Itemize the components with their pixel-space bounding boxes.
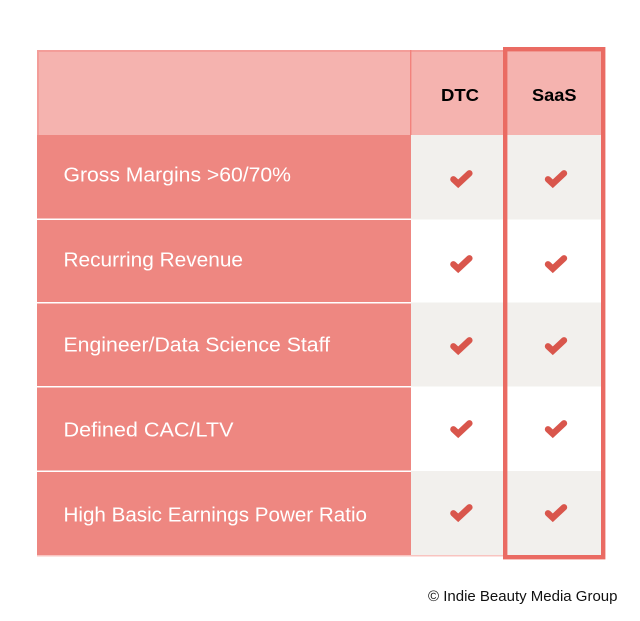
row 3: Engineer/Data Science Staff [37,302,605,386]
copyright credit: © Indie Beauty Media Group [428,589,618,605]
column heading: DTC: DTC [441,85,479,105]
header row [37,50,505,135]
column heading: SaaS: SaaS [532,85,576,105]
row 5: High Basic Earnings Power Ratio [37,471,605,556]
row 5: High Basic Earnings Power Ratio: High Basic Earnings Power Ratio [64,504,367,527]
SaaS header cell [505,50,603,135]
comparison table [37,50,605,556]
SaaS check marks [548,173,564,518]
row 3: Engineer/Data Science Staff: Engineer/Data Science Staff [64,334,330,357]
row 4: Defined CAC/LTV: Defined CAC/LTV [64,419,234,442]
DTC check marks [453,173,469,518]
highlight frame [505,49,603,557]
row 2: Recurring Revenue [37,220,411,302]
row 4: Defined CAC/LTV [37,388,411,470]
row 1: Gross Margins [37,135,605,220]
row 1: Gross Margins: Gross Margins >60/70% [64,164,291,187]
row 2: Recurring Revenue: Recurring Revenue [64,249,243,272]
SaaS highlighted column [505,49,603,557]
